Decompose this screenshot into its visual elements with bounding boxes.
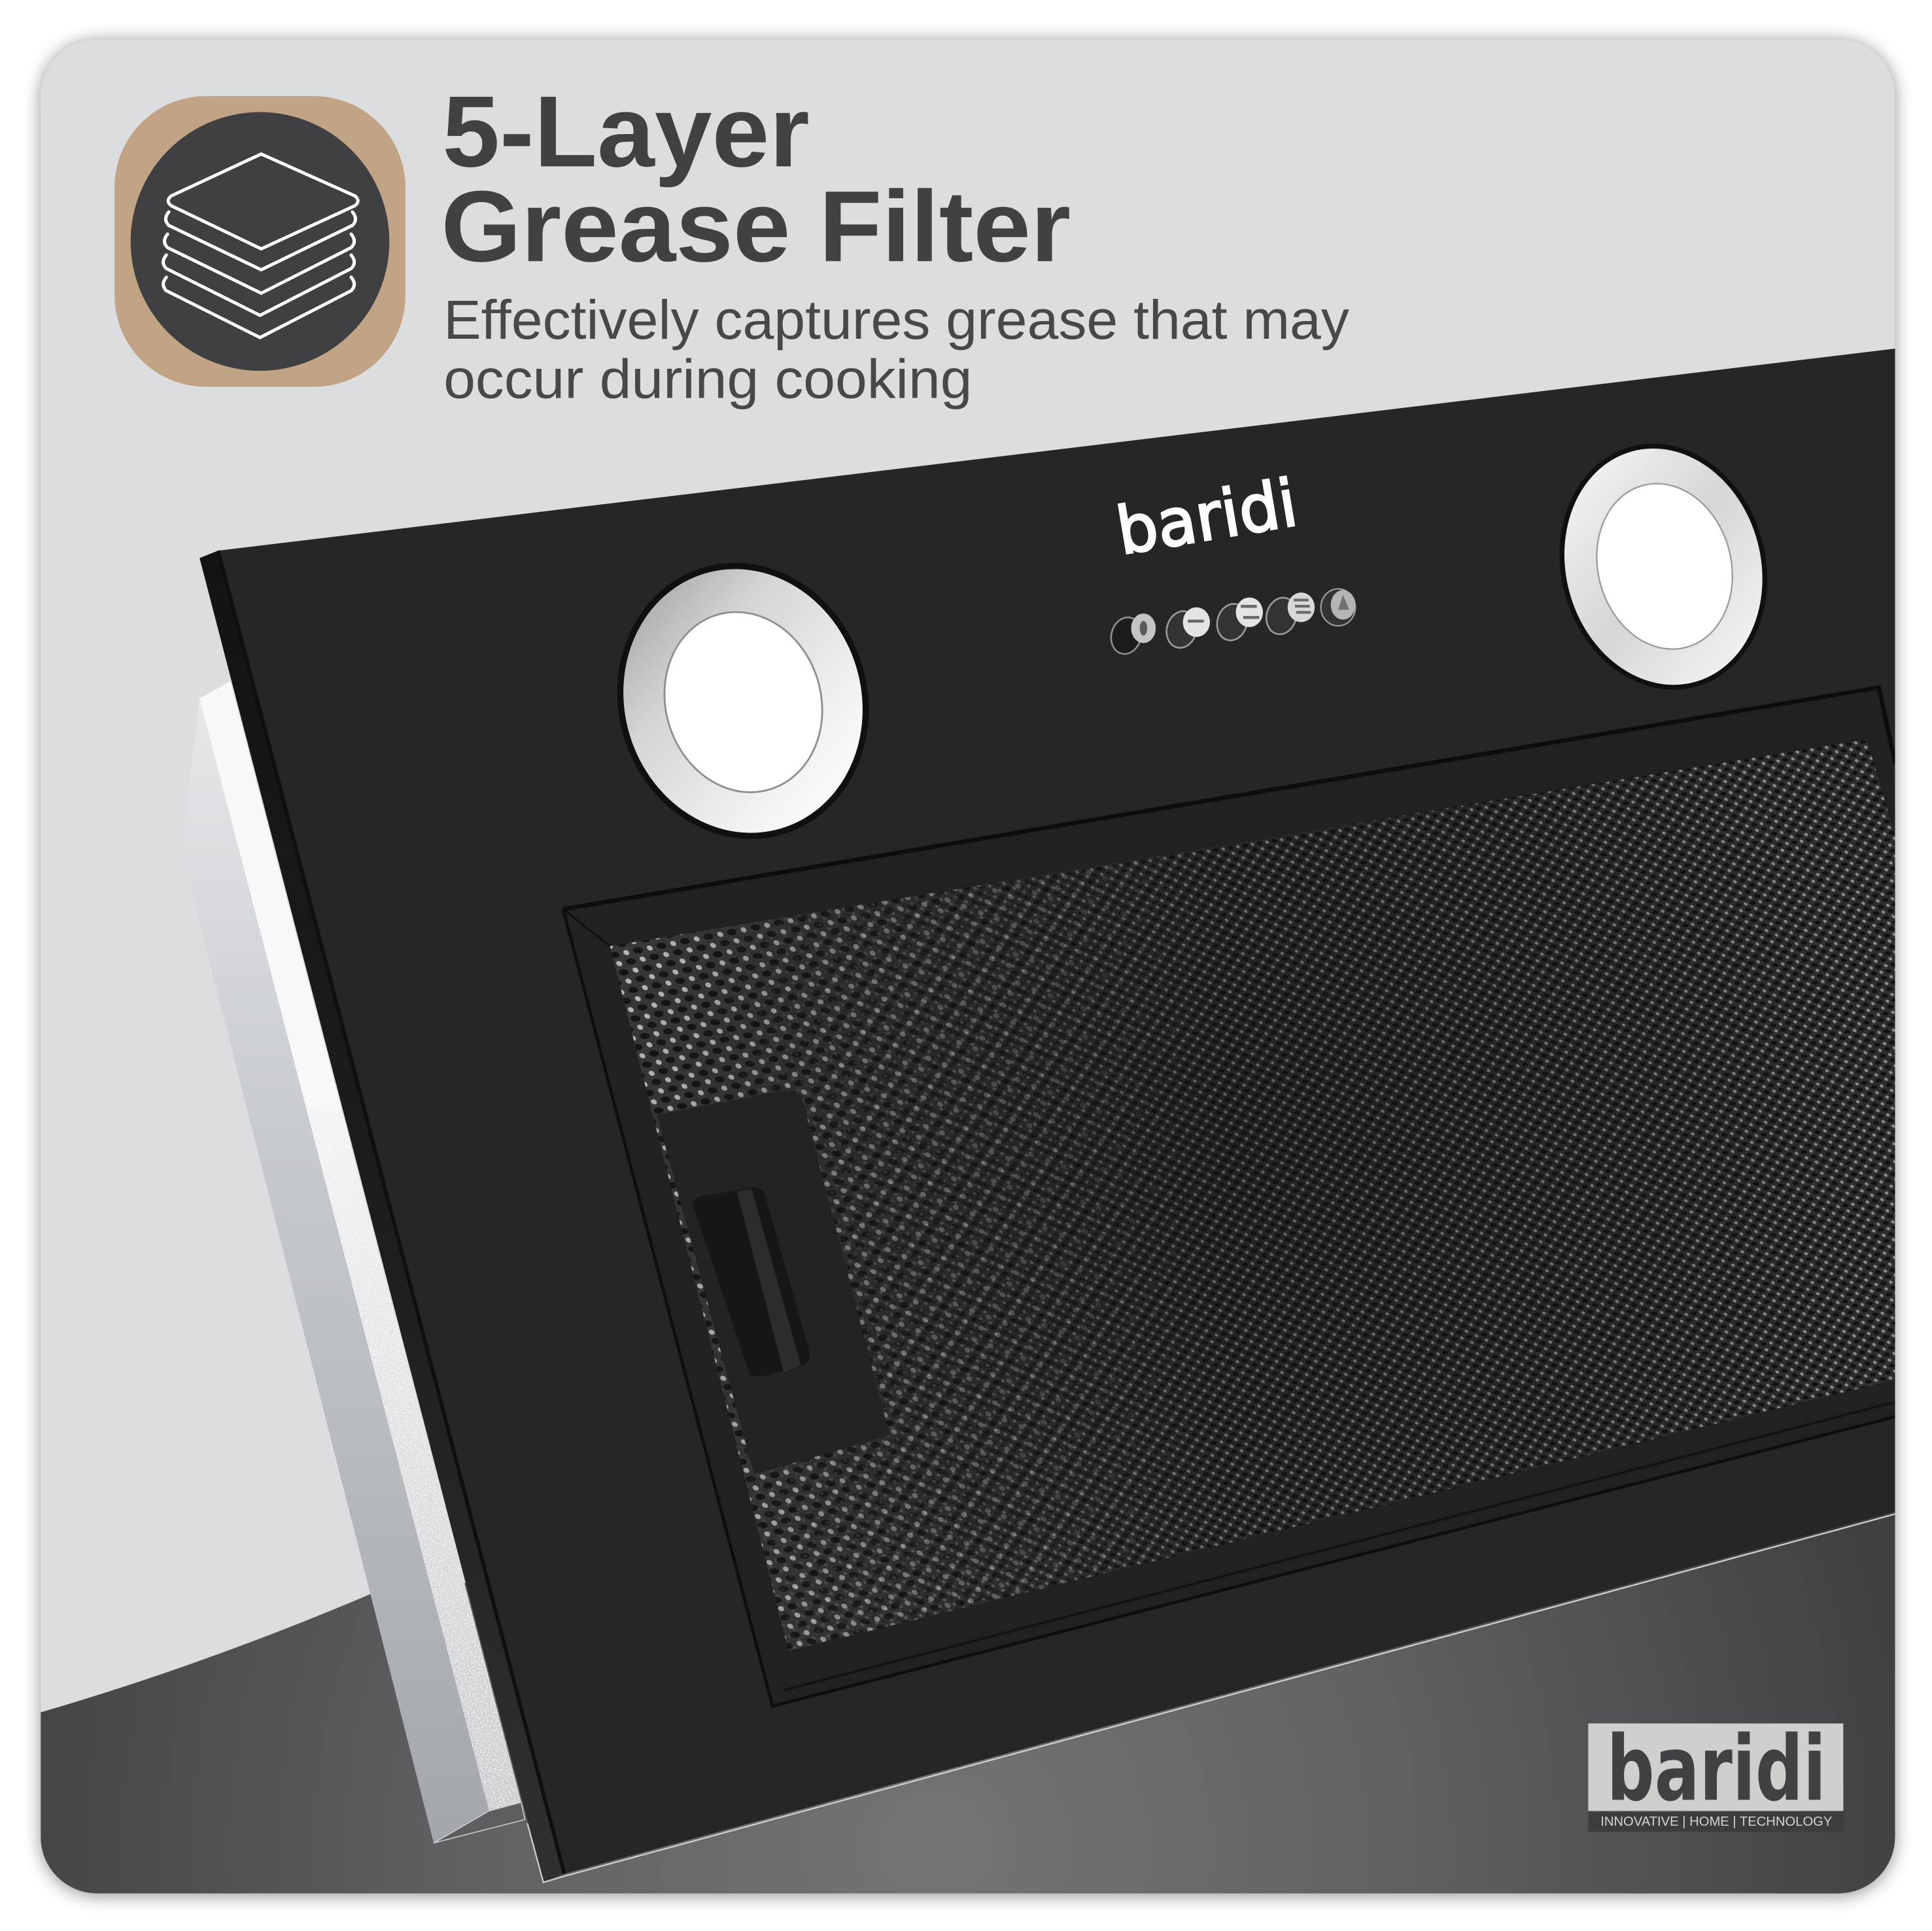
grease filter mesh [610, 739, 1895, 1650]
left light [583, 532, 903, 870]
icon dark circle [131, 112, 389, 371]
title: 5-Layer [442, 75, 810, 188]
left light lens [642, 592, 844, 812]
side light strip [199, 681, 521, 1811]
logo tagline: INNOVATIVE | HOME | TECHNOLOGY [1600, 1814, 1833, 1829]
mesh shading [610, 739, 1895, 1650]
left light steel ring [591, 539, 895, 863]
floor surface [41, 1478, 1895, 1894]
knob light [1321, 589, 1355, 626]
hood product illustration [181, 349, 1895, 1883]
knob I [1163, 607, 1210, 651]
right light steel ring [1538, 426, 1788, 708]
brand logo badge [1588, 1717, 1843, 1832]
knob III [1262, 592, 1315, 638]
hood logo: baridi [1111, 464, 1302, 570]
hood side panel [181, 681, 525, 1843]
right light lens [1579, 468, 1751, 664]
side speckled strip [307, 1109, 521, 1811]
description text: Effectively captures grease that may [443, 288, 1350, 350]
knob 0 [1107, 613, 1156, 657]
filter handle [657, 1090, 889, 1475]
icon badge: filter layers [114, 96, 405, 387]
icon tan background [114, 96, 405, 387]
control knobs [1107, 589, 1355, 657]
filter frame [563, 687, 1895, 1706]
logo tagline strip [1588, 1812, 1843, 1832]
icon: stacked layers [164, 154, 358, 337]
handle slot [693, 1188, 810, 1376]
right light [1532, 420, 1795, 713]
hood glass edge [199, 551, 564, 1883]
filter frame corner bevels [563, 909, 610, 946]
mesh coarse left zone [610, 739, 1895, 1650]
hood black glass face [218, 349, 1895, 1873]
knob II [1213, 598, 1263, 644]
edge shadow line [218, 551, 564, 1873]
logo wordmark: baridi [1607, 1717, 1826, 1821]
side panel bottom wedge [434, 1802, 525, 1843]
title: Grease Filter [441, 169, 1071, 282]
logo light plate [1588, 1724, 1843, 1811]
description text: occur during cooking [443, 348, 972, 410]
hood bottom highlight [527, 1514, 1895, 1883]
